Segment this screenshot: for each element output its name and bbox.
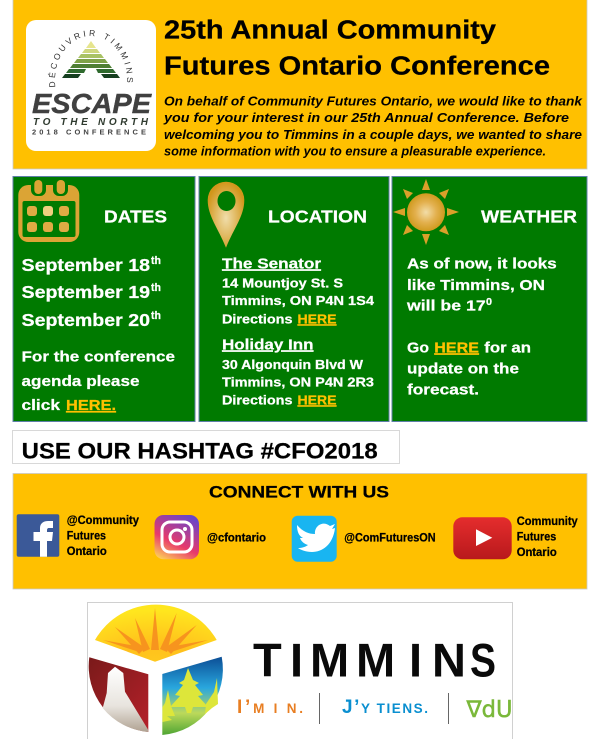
dates list: September 19 <box>22 282 150 302</box>
social: facebook: Futures <box>67 530 106 542</box>
title: 25th Annual Community <box>164 16 497 44</box>
social: twitter: @ComFuturesON <box>344 533 436 545</box>
social: facebook: @Community <box>67 515 140 527</box>
dates list: th <box>151 310 161 322</box>
panel: weather <box>392 176 587 422</box>
agenda note: HERE. <box>66 397 116 414</box>
intro text: some information with you to ensure a pleasurable experience. <box>164 144 546 158</box>
address: the senator <box>222 255 375 326</box>
title <box>164 16 550 80</box>
address: holiday inn: HERE <box>298 392 337 407</box>
heading: dates: DATES <box>104 207 167 227</box>
icon: map pin <box>208 182 244 248</box>
panel: connect with us <box>13 474 587 589</box>
dates list: September 18 <box>22 255 150 275</box>
social: youtube: Community <box>517 516 578 528</box>
forecast text: update on the <box>407 360 519 377</box>
address: the senator: Timmins, ON P4N 1S4 <box>222 293 375 308</box>
intro text: you for your interest in our 25th Annual Conference. Before <box>163 111 569 125</box>
icon: Timmins emblem <box>89 605 223 735</box>
address: holiday inn: 30 Algonquin Blvd W <box>222 357 364 372</box>
forecast text: Go <box>407 339 429 356</box>
forecast text: forecast. <box>407 381 479 398</box>
dates list: September 20 <box>22 310 150 330</box>
tagline: J'y tiens: J’Y TIENS. <box>342 697 428 718</box>
agenda note <box>22 349 175 414</box>
logo: Escape to the North: DÉCOUVRIR TIMMINS <box>48 30 133 87</box>
address: the senator: The Senator <box>222 255 321 272</box>
forecast text: for an <box>484 339 531 356</box>
address: the senator: Directions <box>222 311 292 326</box>
intro text: welcoming you to Timmins in a couple days, we wanted to share <box>164 128 582 142</box>
social: instagram <box>154 515 266 559</box>
logo: Escape to the North: TO THE NORTH <box>33 117 149 128</box>
title: Futures Ontario Conference <box>164 52 550 80</box>
forecast text: 0 <box>486 297 492 308</box>
social: youtube <box>453 516 578 559</box>
icon: sun <box>393 179 459 245</box>
hashtag banner: USE OUR HASHTAG #CFO2018 <box>22 438 378 463</box>
social: facebook: Ontario <box>67 546 107 558</box>
tagline: Cree syllabics: ∇dU <box>466 697 512 723</box>
address: the senator: 14 Mountjoy St. S <box>222 275 343 290</box>
agenda note: For the conference <box>22 349 175 366</box>
logo: Escape to the North: 2018 CONFERENCE <box>32 128 146 136</box>
heading: location: LOCATION <box>268 207 367 227</box>
panel: Timmins logo <box>88 602 512 739</box>
forecast text: will be 17 <box>406 298 486 315</box>
agenda note: click <box>22 397 61 414</box>
agenda note: agenda please <box>22 373 140 390</box>
icon: calendar <box>18 179 79 242</box>
tagline: I'm in: I’M I N. <box>237 697 303 718</box>
social: facebook <box>17 514 140 558</box>
forecast text: like Timmins, ON <box>407 277 545 294</box>
wordmark: Timmins: S <box>470 634 496 686</box>
dates list: th <box>151 282 161 294</box>
wordmark: Timmins: TIMMIN <box>253 634 466 686</box>
social: youtube: Ontario <box>517 547 557 559</box>
intro text <box>163 94 583 158</box>
forecast text <box>406 255 557 398</box>
panel: dates <box>13 176 195 422</box>
address: holiday inn: Directions <box>222 392 292 407</box>
address: holiday inn: Timmins, ON P4N 2R3 <box>222 375 374 390</box>
address: holiday inn <box>222 336 374 407</box>
panel: location <box>199 176 389 422</box>
logo: Escape to the North: ESCAPE <box>32 88 152 119</box>
heading: connect: CONNECT WITH US <box>209 482 389 501</box>
dates list <box>22 255 161 330</box>
forecast text: HERE <box>434 339 479 356</box>
forecast text: As of now, it looks <box>407 255 557 272</box>
heading: weather: WEATHER <box>481 207 577 227</box>
panel: header <box>12 0 588 170</box>
logo: Escape to the North <box>26 20 156 151</box>
dates list: th <box>151 255 161 267</box>
intro text: On behalf of Community Futures Ontario, we would like to thank <box>164 94 583 108</box>
social: instagram: @cfontario <box>207 533 266 545</box>
social: twitter <box>292 516 436 562</box>
address: the senator: HERE <box>298 311 337 326</box>
address: holiday inn: Holiday Inn <box>222 336 314 353</box>
hashtag banner <box>12 430 400 464</box>
social: youtube: Futures <box>517 532 556 544</box>
